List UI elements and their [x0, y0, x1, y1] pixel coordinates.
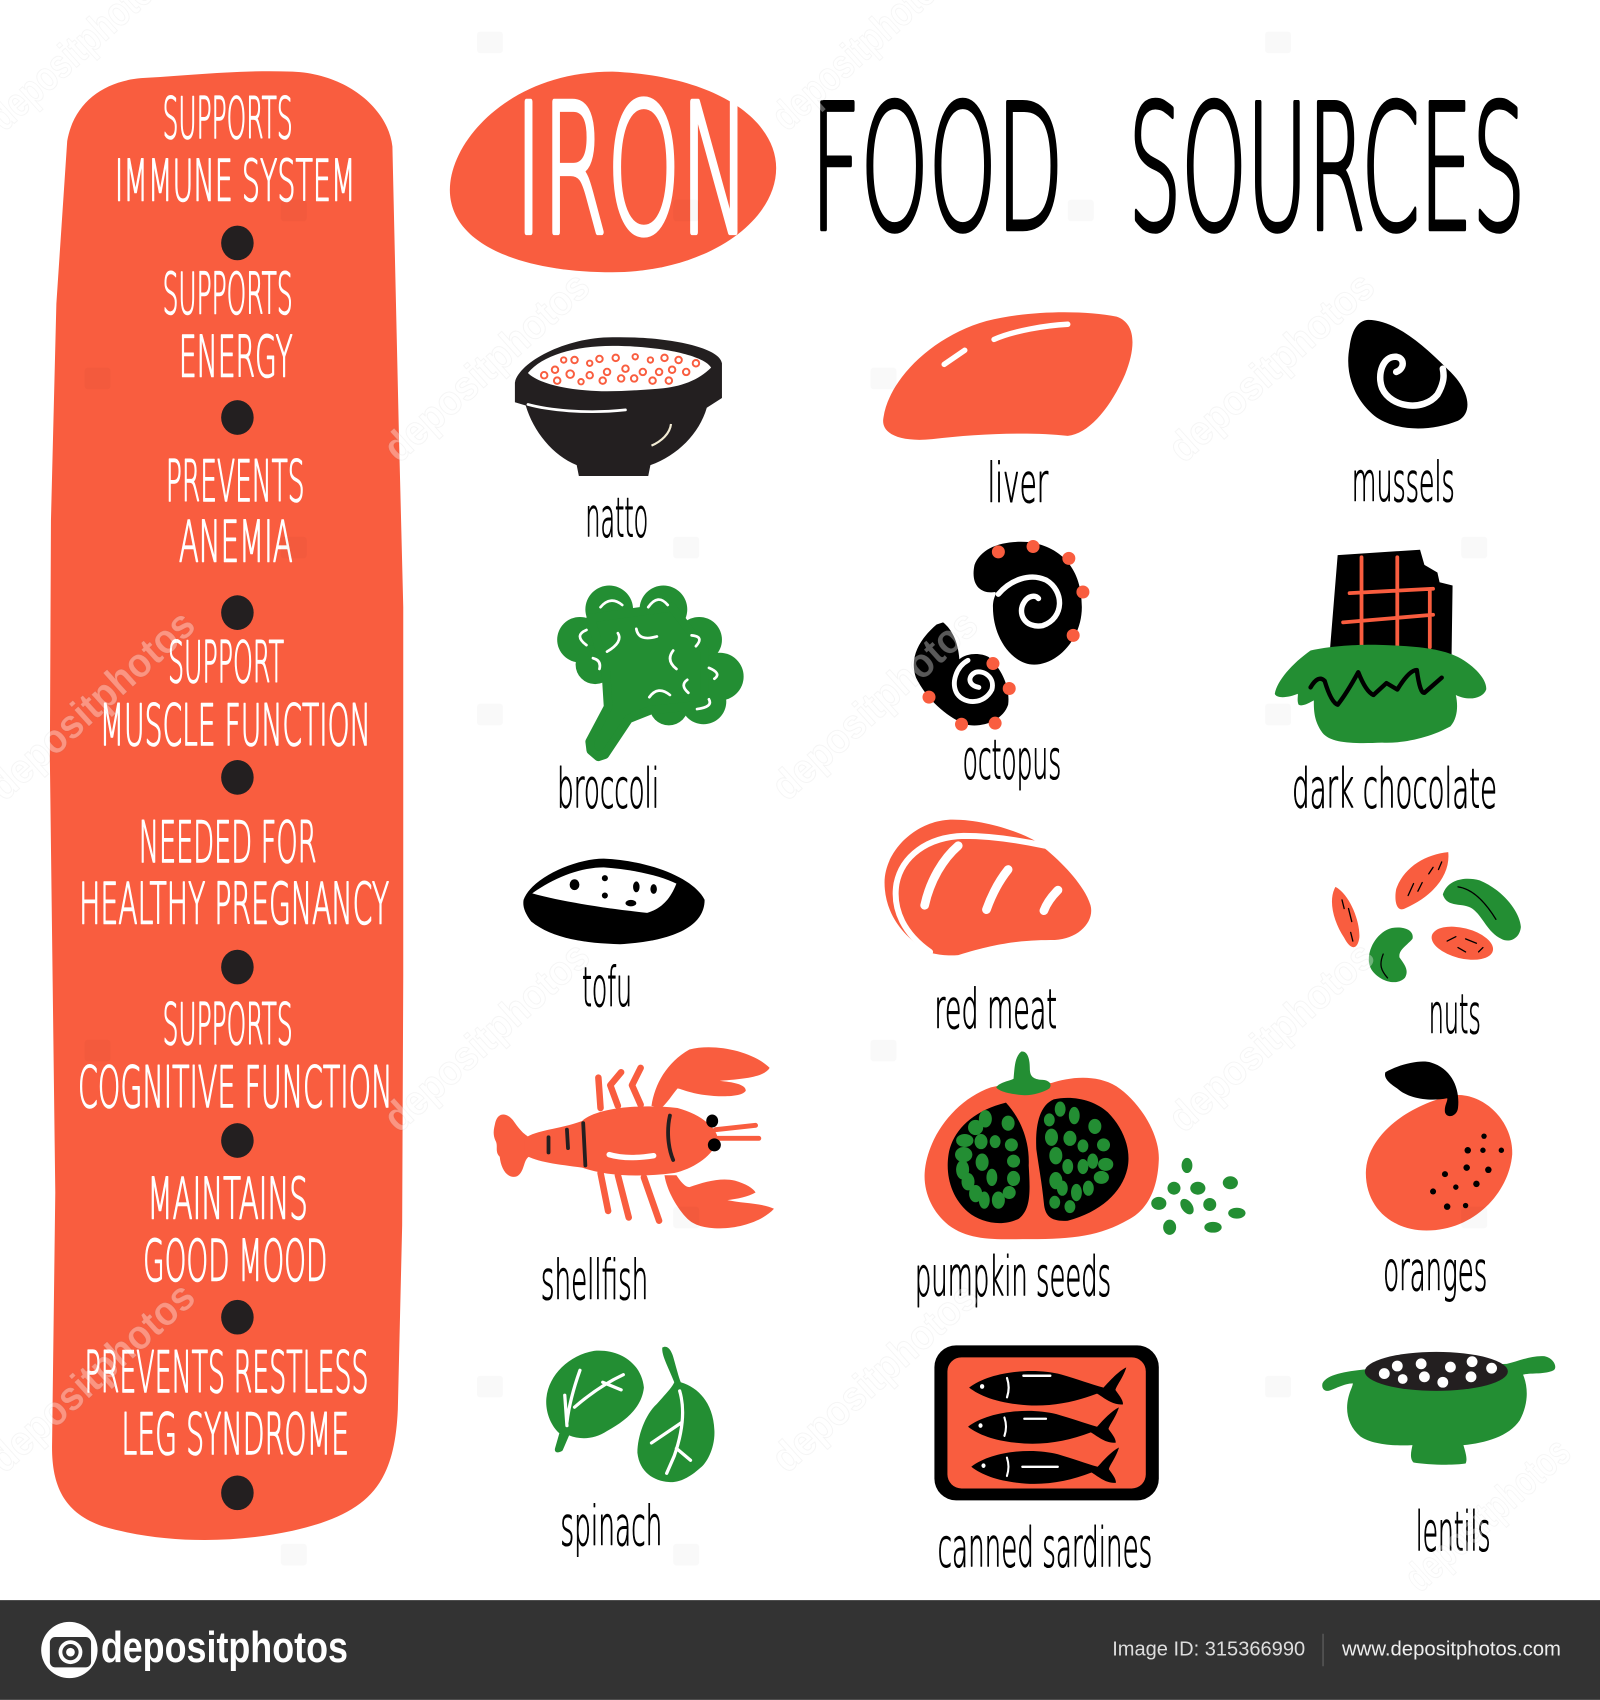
watermarks: depositphotos	[1159, 932, 1383, 1141]
panel: iron benefits: GOOD MOOD	[143, 1227, 327, 1294]
food: tofu: tofu	[582, 956, 632, 1019]
separator dot	[221, 1300, 254, 1335]
watermarks: depositphotos	[762, 1273, 986, 1481]
benefit: prevents anemia: ANEMIA	[179, 509, 293, 576]
benefit: prevents anemia	[166, 448, 305, 576]
benefit: maintains good mood	[143, 1166, 327, 1294]
watermarks: depositphotos	[374, 932, 598, 1141]
image id: Image ID: 315366990	[1112, 1638, 1305, 1660]
food: pumpkin seeds: pumpkin seeds	[915, 1246, 1111, 1309]
food: natto: natto	[585, 487, 648, 550]
separator dot	[221, 595, 254, 630]
food: lentils	[1322, 1352, 1555, 1563]
benefit: needed for healthy pregnancy	[79, 809, 389, 938]
benefit: support muscle function	[100, 629, 371, 759]
separator dot	[221, 1123, 254, 1158]
logo text: depositphotos	[101, 1624, 348, 1672]
food: octopus: octopus	[963, 728, 1061, 791]
food: shellfish	[494, 1047, 774, 1312]
title	[450, 67, 1525, 275]
loose seeds	[1151, 1158, 1246, 1235]
panel: iron benefits: PREVENTS RESTLESS	[85, 1339, 369, 1406]
separator dot	[221, 400, 254, 435]
food: pumpkin seeds	[915, 1052, 1246, 1309]
title: FOOD	[811, 68, 1063, 270]
food: broccoli: broccoli	[557, 758, 659, 821]
separator dot	[221, 226, 254, 260]
food: nuts	[1332, 852, 1521, 1046]
watermarks: depositphotos	[1159, 263, 1383, 471]
food: lentils: lentils	[1416, 1500, 1491, 1563]
food: octopus	[914, 540, 1089, 791]
sardine 2	[968, 1407, 1119, 1444]
logo icon: camera	[41, 1622, 98, 1678]
panel: iron benefits: IMMUNE SYSTEM	[115, 148, 356, 215]
sardine 1	[969, 1367, 1126, 1406]
text: canned sardines	[938, 1517, 1152, 1580]
benefit: prevents restless leg syndrome	[85, 1339, 369, 1468]
food: tofu	[523, 859, 705, 1019]
food: dark chocolate	[1275, 550, 1497, 821]
separator dot	[221, 1475, 254, 1510]
benefit: support muscle function: SUPPORT	[168, 629, 284, 696]
food: shellfish: shellfish	[541, 1249, 648, 1312]
food: red meat	[885, 820, 1091, 1041]
panel: iron benefits: HEALTHY PREGNANCY	[79, 871, 389, 938]
benefit: prevents restless leg syndrome: LEG SYNDROME	[121, 1401, 349, 1468]
label: liver: liver	[988, 452, 1049, 515]
food: spinach: spinach	[560, 1495, 662, 1558]
food: broccoli	[557, 586, 744, 821]
food: spinach	[546, 1347, 714, 1558]
food: mussels: mussels	[1352, 451, 1455, 514]
food: natto	[515, 337, 722, 550]
benefit: needed for healthy pregnancy: NEEDED FOR	[139, 809, 317, 876]
benefit: supports cognitive function: SUPPORTS	[163, 991, 293, 1058]
benefit: supports cognitive function	[78, 991, 392, 1121]
separator dot	[221, 950, 254, 984]
food: red meat: red meat	[934, 978, 1057, 1041]
benefit: supports immune system	[115, 85, 356, 215]
food: mussels	[1348, 320, 1467, 514]
panel: iron benefits: PREVENTS	[166, 448, 305, 515]
footer bar	[0, 1600, 1600, 1700]
benefit: supports immune system: SUPPORTS	[163, 85, 293, 152]
separator dot	[221, 760, 254, 795]
food: oranges: oranges	[1383, 1240, 1487, 1303]
benefit: supports energy	[163, 260, 293, 390]
food: liver	[883, 312, 1132, 515]
watermarks: depositphotos	[374, 263, 598, 471]
panel: iron benefits: SUPPORTS	[163, 260, 293, 327]
panel: iron benefits: MUSCLE FUNCTION	[100, 692, 371, 759]
food: oranges	[1366, 1062, 1512, 1303]
sardine 3	[971, 1447, 1119, 1484]
food: canned sardines	[934, 1345, 1159, 1580]
watermarks: depositphotos	[762, 601, 986, 809]
panel: iron benefits: COGNITIVE FUNCTION	[78, 1054, 392, 1121]
panel: iron benefits: ENERGY	[179, 323, 293, 390]
iron badge	[450, 67, 776, 275]
panel: iron benefits	[50, 71, 403, 1540]
benefit: maintains good mood: MAINTAINS	[147, 1166, 308, 1233]
website: www.depositphotos.com	[1341, 1638, 1561, 1660]
food: nuts: nuts	[1429, 983, 1481, 1046]
iron badge: IRON	[515, 67, 750, 275]
